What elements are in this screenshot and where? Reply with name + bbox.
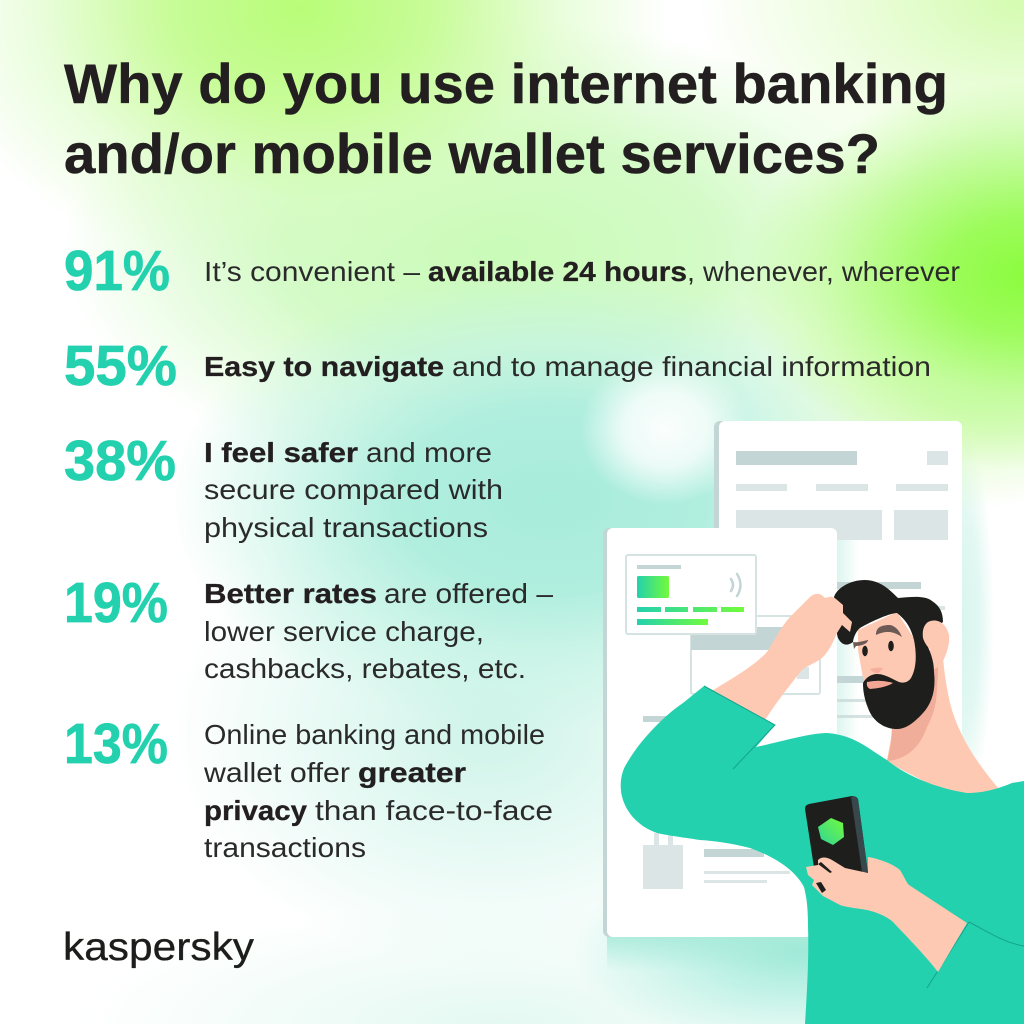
- stat: 13%: wallet offer: [203, 757, 350, 788]
- stat: 38%: 38%: [64, 429, 176, 493]
- nose: [870, 668, 883, 673]
- phone: [805, 796, 868, 893]
- stat: 19%: Better rates: [204, 578, 377, 609]
- title: Why do you use internet banking: [64, 52, 948, 115]
- hair and beard: [834, 580, 943, 729]
- stat: 55%: Easy to navigate: [204, 351, 444, 382]
- ear: [923, 621, 949, 661]
- stat: 38%: physical transactions: [204, 512, 488, 543]
- stat: 13%: transactions: [204, 832, 366, 863]
- stat: 55%: and to manage financial information: [452, 351, 931, 382]
- raised arm and fist: [710, 594, 852, 720]
- person illustration: [621, 580, 1024, 1024]
- sweater: [621, 686, 1024, 1024]
- eyebrows: [853, 625, 902, 649]
- stat: 91%: 91%: [64, 239, 170, 303]
- stat: 13%: than face-to-face: [315, 795, 553, 826]
- stat: 19%: are offered –: [384, 578, 553, 609]
- stat: 91%: , whenever, wherever: [687, 256, 960, 287]
- logo: kaspersky: kaspersky: [63, 926, 255, 969]
- stat: 13%: Online banking and mobile: [204, 719, 545, 750]
- stat: 19%: lower service charge,: [204, 616, 484, 647]
- stat: 38%: secure compared with: [204, 474, 503, 505]
- neck shadow: [887, 667, 938, 761]
- neck: [887, 650, 1000, 800]
- stat: 13%: 13%: [64, 712, 168, 776]
- title: and/or mobile wallet services?: [64, 122, 880, 185]
- stat: 13%: privacy: [204, 795, 307, 826]
- stat: 13%: [64, 712, 553, 863]
- front document: [603, 528, 837, 971]
- stat: 13%: greater: [358, 757, 466, 788]
- stat: 38%: and more: [366, 437, 492, 468]
- stat: 19%: [64, 571, 553, 684]
- stat: 91%: available 24 hours: [428, 256, 687, 287]
- phone corner over fingers: [816, 862, 832, 893]
- stat: 38%: [64, 429, 503, 543]
- stat: 38%: I feel safer: [204, 437, 358, 468]
- stat: 91%: It’s convenient –: [204, 256, 420, 287]
- mouth: [867, 681, 893, 689]
- stat: 91%: [64, 239, 960, 303]
- bank card: [626, 555, 756, 634]
- holding hand: [806, 857, 967, 972]
- stat: 19%: cashbacks, rebates, etc.: [204, 653, 526, 684]
- title: [64, 52, 948, 185]
- eyes: [888, 641, 894, 651]
- stat: 55%: [64, 334, 931, 398]
- back document: [714, 421, 962, 821]
- phone hexagon icon: [818, 818, 844, 845]
- face: [858, 612, 918, 695]
- stat: 55%: 55%: [64, 334, 177, 398]
- sleeve creases: [704, 686, 1024, 988]
- stat: 19%: 19%: [64, 571, 168, 635]
